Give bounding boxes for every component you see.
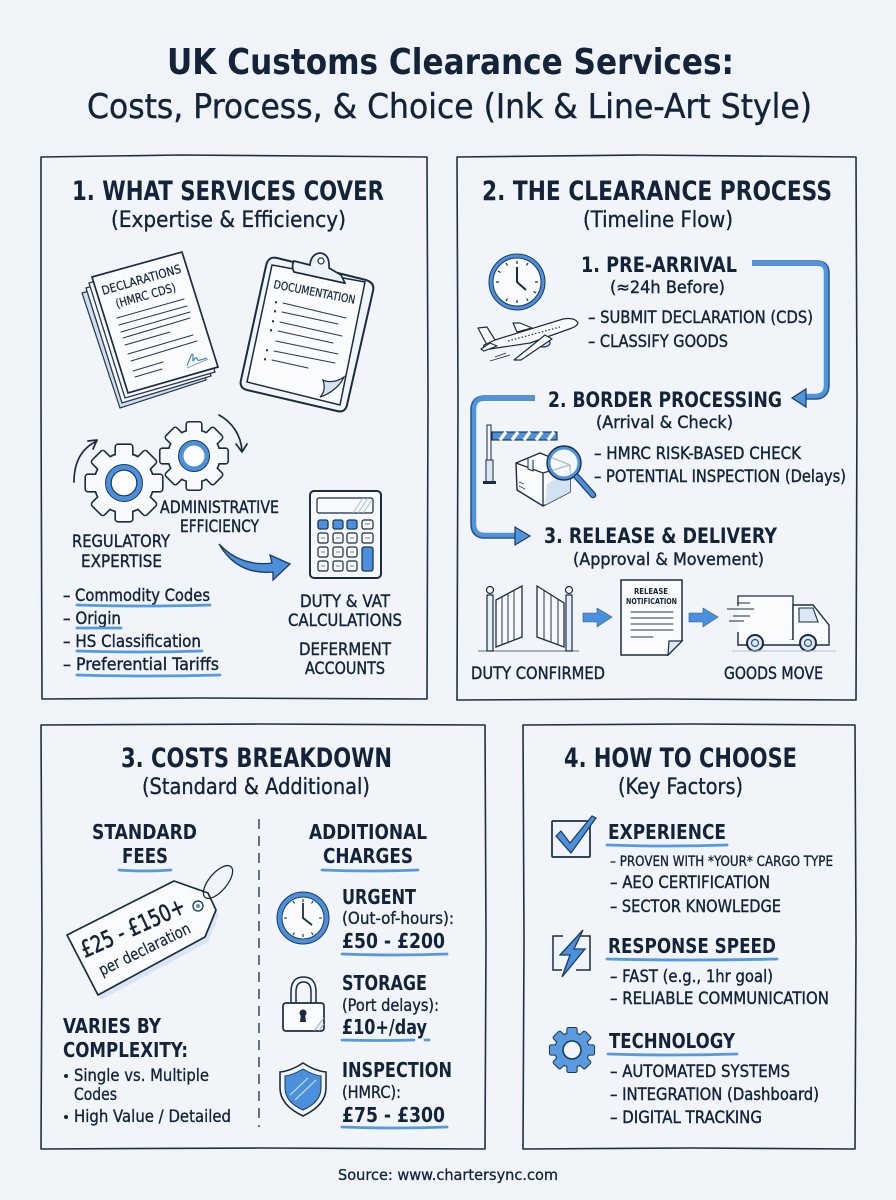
factor: response speed: – FAST (e.g., 1hr goal) bbox=[610, 967, 773, 987]
item: urgent charge: URGENT bbox=[342, 885, 416, 909]
label: regulatory expertise: REGULATORY bbox=[72, 532, 171, 552]
panel: how to choose bbox=[523, 724, 856, 1149]
icon: check box bbox=[552, 816, 596, 857]
heading: additional charges bbox=[309, 820, 427, 871]
list: classification items: – HS Classification bbox=[63, 632, 201, 652]
label: administrative efficiency: ADMINISTRATIVE bbox=[160, 498, 279, 518]
step: border processing: – POTENTIAL INSPECTION (Delays) bbox=[594, 467, 846, 487]
heading: standard fees: FEES bbox=[122, 844, 168, 868]
text: duty and deferment: DUTY & VAT bbox=[300, 592, 391, 612]
step: border processing: 2. BORDER PROCESSING bbox=[548, 388, 782, 413]
heading: what services cover: 1. WHAT SERVICES COVER bbox=[72, 176, 384, 207]
icon: calculator bbox=[310, 491, 381, 578]
icon: declarations document stack: (HMRC CDS) bbox=[114, 280, 177, 311]
factor: experience: EXPERIENCE bbox=[608, 820, 726, 844]
step: pre-arrival: 1. PRE-ARRIVAL bbox=[581, 253, 737, 278]
heading: standard fees: STANDARD bbox=[92, 820, 197, 844]
icon: border barrier bbox=[483, 425, 557, 484]
panel: clearance process bbox=[457, 155, 857, 700]
factor: response speed bbox=[607, 934, 829, 1009]
icon: release notification: NOTIFICATION bbox=[626, 597, 677, 606]
item: storage charge: £10+/day bbox=[342, 1015, 427, 1039]
panel: what services cover bbox=[41, 155, 428, 699]
arrow: gates to notification bbox=[583, 608, 612, 627]
item: inspection charge bbox=[342, 1058, 452, 1128]
icon: price tag: £25 - £150+ bbox=[77, 894, 190, 963]
title bbox=[87, 42, 812, 127]
text: varies by complexity: Single vs. Multiple bbox=[74, 1066, 209, 1085]
icon: open gates bbox=[478, 586, 579, 651]
item: inspection charge: (HMRC): bbox=[342, 1083, 401, 1102]
factor: technology bbox=[608, 1029, 819, 1128]
step: pre-arrival bbox=[581, 253, 813, 352]
source line: Source: www.chartersync.com bbox=[338, 1166, 558, 1184]
list: classification items: – Commodity Codes bbox=[63, 586, 210, 606]
heading: additional charges: ADDITIONAL bbox=[309, 820, 427, 844]
text: duty and deferment: DEFERMENT bbox=[299, 640, 392, 660]
icon: release notification bbox=[621, 580, 682, 655]
arrow: to calculator bbox=[219, 544, 290, 580]
icon: delivery truck bbox=[727, 596, 836, 651]
list: classification items: – Preferential Tariffs bbox=[63, 655, 219, 675]
heading: clearance process: (Timeline Flow) bbox=[583, 208, 733, 233]
arrow: pre-arrival to border bbox=[752, 263, 827, 407]
icon: lightning bolt bbox=[553, 930, 590, 977]
factor: technology: TECHNOLOGY bbox=[609, 1029, 735, 1053]
item: inspection charge: INSPECTION bbox=[342, 1058, 452, 1082]
label: administrative efficiency bbox=[160, 498, 279, 537]
heading: additional charges: CHARGES bbox=[323, 844, 413, 868]
icon: price tag: per declaration bbox=[95, 919, 194, 980]
heading: costs breakdown bbox=[121, 743, 392, 800]
text: duty and deferment: CALCULATIONS bbox=[288, 611, 402, 631]
item: storage charge bbox=[342, 971, 439, 1040]
icon: urgent clock bbox=[277, 892, 329, 944]
item: storage charge: (Port delays): bbox=[342, 996, 439, 1015]
title: Costs, Process, & Choice (Ink & Line-Art Style) bbox=[87, 87, 812, 127]
heading: how to choose: 4. HOW TO CHOOSE bbox=[564, 743, 797, 774]
heading: what services cover: (Expertise & Efficiency) bbox=[111, 208, 346, 233]
step: pre-arrival: (≈24h Before) bbox=[610, 278, 725, 298]
step: border processing: – HMRC RISK-BASED CHECK bbox=[594, 444, 802, 464]
label: regulatory expertise bbox=[72, 532, 171, 572]
icon: technology gear bbox=[550, 1028, 594, 1072]
heading: standard fees bbox=[92, 820, 197, 871]
heading: what services cover bbox=[72, 176, 384, 233]
factor: response speed: – RELIABLE COMMUNICATION bbox=[610, 989, 829, 1009]
heading: costs breakdown: 3. COSTS BREAKDOWN bbox=[121, 743, 392, 774]
icon: shield bbox=[280, 1063, 326, 1116]
heading: costs breakdown: (Standard & Additional) bbox=[142, 775, 370, 800]
step: release and delivery: (Approval & Movement) bbox=[573, 550, 764, 570]
icon: box and magnifier bbox=[516, 446, 593, 506]
step: release and delivery: 3. RELEASE & DELIVERY bbox=[544, 524, 777, 549]
heading: how to choose bbox=[564, 743, 797, 800]
text: varies by complexity: COMPLEXITY: bbox=[63, 1038, 188, 1062]
icon: padlock bbox=[283, 977, 324, 1031]
panel: costs breakdown bbox=[41, 724, 486, 1149]
step: pre-arrival: – SUBMIT DECLARATION (CDS) bbox=[588, 308, 813, 328]
item: inspection charge: £75 - £300 bbox=[342, 1103, 445, 1127]
arrow: border to release bbox=[473, 398, 535, 545]
label: administrative efficiency: EFFICIENCY bbox=[180, 517, 259, 537]
text: varies by complexity: VARIES BY bbox=[63, 1014, 161, 1038]
text: varies by complexity: High Value / Detailed bbox=[74, 1107, 231, 1126]
item: storage charge: STORAGE bbox=[342, 971, 427, 995]
item: urgent charge: £50 - £200 bbox=[342, 929, 445, 953]
factor: technology: – AUTOMATED SYSTEMS bbox=[610, 1062, 790, 1082]
text: duty and deferment bbox=[288, 592, 402, 679]
step: border processing: (Arrival & Check) bbox=[596, 413, 733, 433]
icon: declarations document stack: DECLARATIONS bbox=[100, 262, 183, 298]
icon: gears bbox=[74, 415, 247, 521]
icon: declarations document stack bbox=[82, 252, 218, 408]
labels: duty confirmed and goods move: DUTY CONFIRMED bbox=[471, 664, 605, 684]
text: duty and deferment: ACCOUNTS bbox=[305, 659, 385, 679]
factor: technology: – DIGITAL TRACKING bbox=[610, 1108, 762, 1128]
item: urgent charge bbox=[342, 885, 454, 955]
item: urgent charge: (Out-of-hours): bbox=[342, 909, 454, 928]
list: classification items bbox=[63, 586, 220, 676]
icon: clock bbox=[489, 254, 545, 310]
heading: clearance process bbox=[482, 176, 832, 233]
list: classification items: – Origin bbox=[63, 609, 121, 629]
factor: experience: – SECTOR KNOWLEDGE bbox=[610, 897, 781, 917]
icon: price tag bbox=[67, 861, 238, 1000]
factor: experience bbox=[607, 820, 833, 917]
factor: experience: – AEO CERTIFICATION bbox=[610, 873, 770, 893]
text: varies by complexity bbox=[63, 1014, 231, 1126]
labels: duty confirmed and goods move bbox=[471, 664, 823, 684]
step: border processing bbox=[548, 388, 846, 487]
factor: technology: – INTEGRATION (Dashboard) bbox=[610, 1085, 819, 1105]
icon: airplane bbox=[478, 318, 578, 361]
factor: experience: – PROVEN WITH *YOUR* CARGO TYPE bbox=[610, 854, 833, 870]
heading: how to choose: (Key Factors) bbox=[618, 775, 743, 800]
step: release and delivery bbox=[544, 524, 777, 570]
text: varies by complexity: Codes bbox=[74, 1085, 117, 1104]
step: pre-arrival: – CLASSIFY GOODS bbox=[588, 332, 728, 352]
icon: release notification: RELEASE bbox=[634, 587, 668, 596]
factor: response speed: RESPONSE SPEED bbox=[608, 934, 776, 958]
labels: duty confirmed and goods move: GOODS MOVE bbox=[724, 664, 823, 684]
divider bbox=[258, 819, 260, 1127]
title: UK Customs Clearance Services: bbox=[167, 42, 734, 83]
icon: documentation clipboard bbox=[241, 253, 373, 411]
arrow: notification to truck bbox=[689, 608, 718, 627]
label: regulatory expertise: EXPERTISE bbox=[81, 552, 162, 572]
icon: documentation clipboard: DOCUMENTATION bbox=[272, 277, 357, 307]
